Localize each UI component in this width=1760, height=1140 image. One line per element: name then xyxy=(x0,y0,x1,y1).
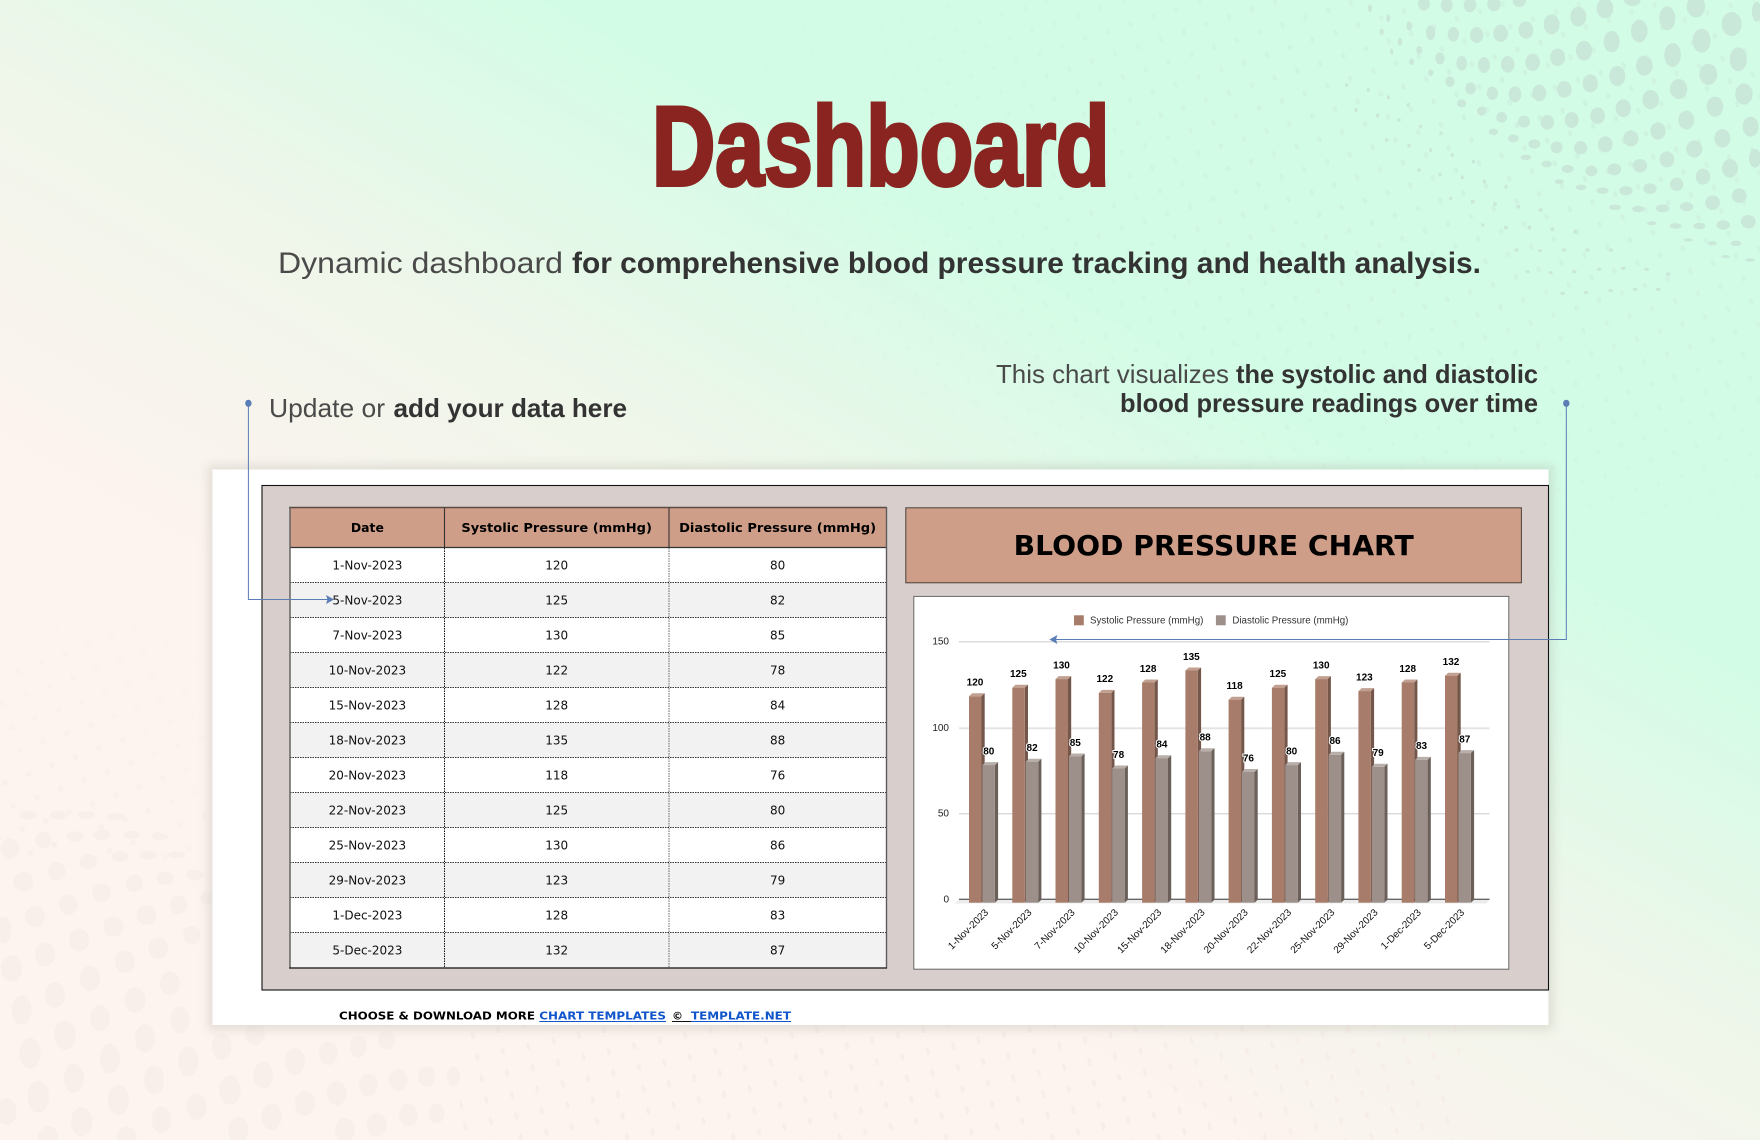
table rows: 78 xyxy=(770,664,785,678)
x axis labels: 29-Nov-2023 xyxy=(1332,907,1381,956)
table rows: 20-Nov-2023 xyxy=(329,768,406,782)
footer link line xyxy=(339,1010,792,1022)
data labels: 76 xyxy=(1243,753,1254,764)
data labels xyxy=(967,652,1471,764)
x axis labels: 25-Nov-2023 xyxy=(1289,907,1338,956)
table rows: 130 xyxy=(545,838,568,852)
table rows: 88 xyxy=(770,734,785,748)
x axis labels: 15-Nov-2023 xyxy=(1116,907,1165,956)
footer link line: © xyxy=(672,1010,683,1022)
table rows: 7-Nov-2023 xyxy=(332,628,402,642)
chart heading xyxy=(906,508,1521,583)
x axis labels: 1-Nov-2023 xyxy=(946,907,991,952)
table rows: 15-Nov-2023 xyxy=(329,698,406,712)
table rows: 5-Dec-2023 xyxy=(332,944,402,958)
table rows: 80 xyxy=(770,558,785,572)
x axis labels: 5-Dec-2023 xyxy=(1422,907,1467,952)
legend: Diastolic Pressure (mmHg) xyxy=(1232,615,1348,626)
data labels: 82 xyxy=(1027,743,1038,754)
table rows: 85 xyxy=(770,628,785,642)
table rows: 1-Dec-2023 xyxy=(332,908,402,922)
arrow: chart callout to chart xyxy=(1049,400,1570,644)
table rows: 76 xyxy=(770,768,785,782)
table rows: 125 xyxy=(545,804,568,818)
table rows: 118 xyxy=(545,768,568,782)
table rows: 135 xyxy=(545,734,568,748)
panel: bar chart xyxy=(914,596,1509,969)
data labels: 120 xyxy=(967,678,984,689)
table rows: 18-Nov-2023 xyxy=(329,734,406,748)
data labels: 79 xyxy=(1373,748,1384,759)
table rows xyxy=(290,548,886,968)
table rows: 86 xyxy=(770,838,785,852)
x axis labels: 1-Dec-2023 xyxy=(1379,907,1424,952)
x axis labels: 7-Nov-2023 xyxy=(1033,907,1078,952)
data labels: 83 xyxy=(1416,741,1427,752)
data labels: 128 xyxy=(1399,664,1416,675)
table rows: 122 xyxy=(545,664,568,678)
y axis and grid: 100 xyxy=(932,723,949,734)
bars: diastolic series xyxy=(982,748,1474,903)
table rows: 22-Nov-2023 xyxy=(329,804,406,818)
x axis labels: 22-Nov-2023 xyxy=(1245,907,1294,956)
data labels: 125 xyxy=(1010,669,1027,680)
table rows: 125 xyxy=(545,594,568,608)
table rows: 123 xyxy=(545,874,568,888)
arrow: data callout to table xyxy=(245,400,334,604)
panel: frame xyxy=(262,486,1548,990)
data labels: 84 xyxy=(1156,740,1168,750)
data labels: 130 xyxy=(1313,660,1330,671)
data labels: 135 xyxy=(1183,652,1200,663)
table rows: 128 xyxy=(545,908,568,922)
bars: systolic series xyxy=(969,668,1461,903)
callout text: chart: the systolic and diastolic xyxy=(1236,359,1538,389)
panel: data table xyxy=(289,507,887,968)
table rows: 29-Nov-2023 xyxy=(329,874,406,888)
data labels: 130 xyxy=(1053,660,1070,671)
data labels: 118 xyxy=(1227,681,1243,692)
x axis labels: 10-Nov-2023 xyxy=(1072,907,1121,956)
callout text: data xyxy=(269,393,627,423)
halftone dots: bottom left xyxy=(0,810,460,1140)
table header: Diastolic Pressure (mmHg) xyxy=(679,520,876,535)
halftone dots: top right xyxy=(1345,0,1760,295)
table rows: 120 xyxy=(545,558,568,572)
table rows: 1-Nov-2023 xyxy=(332,558,402,572)
table rows: 82 xyxy=(770,594,785,608)
x axis labels: 5-Nov-2023 xyxy=(990,907,1035,952)
x axis labels: 18-Nov-2023 xyxy=(1159,907,1208,956)
table rows: 87 xyxy=(770,944,785,958)
table rows: 80 xyxy=(770,804,785,818)
footer link line: CHOOSE & DOWNLOAD MORE xyxy=(339,1010,535,1022)
table header: Systolic Pressure (mmHg) xyxy=(461,520,652,535)
legend xyxy=(1074,615,1348,626)
table rows: 84 xyxy=(770,698,785,712)
y axis and grid: 0 xyxy=(943,895,949,906)
footer link line: TEMPLATE.NET xyxy=(691,1010,792,1022)
chart heading: BLOOD PRESSURE CHART xyxy=(1014,529,1414,562)
data labels: 80 xyxy=(1286,746,1298,757)
table rows: 132 xyxy=(545,944,568,958)
data labels: 122 xyxy=(1096,674,1114,685)
table rows: 10-Nov-2023 xyxy=(329,664,406,678)
data labels: 125 xyxy=(1270,669,1287,680)
table rows: 83 xyxy=(770,908,785,922)
callout text: chart xyxy=(996,359,1538,418)
data labels: 123 xyxy=(1356,672,1373,683)
title: Dashboard xyxy=(652,84,1110,209)
data labels: 80 xyxy=(983,746,995,757)
y axis and grid: 150 xyxy=(932,637,949,648)
legend: Systolic Pressure (mmHg) xyxy=(1090,615,1203,626)
callout text: chart: This chart visualizes xyxy=(996,359,1229,389)
data labels: 86 xyxy=(1329,736,1341,747)
callout text: chart: blood pressure readings over time xyxy=(1120,388,1538,418)
callout text: data: Update or xyxy=(269,393,385,423)
data labels: 132 xyxy=(1443,657,1460,668)
table rows: 5-Nov-2023 xyxy=(332,594,402,608)
data labels: 87 xyxy=(1459,734,1471,745)
callout text: data: add your data here xyxy=(394,393,627,423)
table rows: 79 xyxy=(770,874,785,888)
y axis and grid: 50 xyxy=(938,809,949,820)
table rows: 25-Nov-2023 xyxy=(329,838,406,852)
subtitle: for comprehensive blood pressure tracking and health analysis. xyxy=(572,247,1481,280)
subtitle: Dynamic dashboard xyxy=(278,247,563,280)
table header xyxy=(290,508,886,548)
footer link line: CHART TEMPLATES xyxy=(539,1010,666,1022)
x axis labels xyxy=(946,907,1467,956)
y axis and grid xyxy=(932,637,1490,906)
data labels: 128 xyxy=(1140,664,1157,675)
data labels: 88 xyxy=(1200,733,1211,744)
table header: Date xyxy=(351,520,384,535)
data labels: 78 xyxy=(1113,750,1125,761)
table rows: 130 xyxy=(545,628,568,642)
card shadow xyxy=(208,465,1553,1030)
table rows: 128 xyxy=(545,698,568,712)
x axis labels: 20-Nov-2023 xyxy=(1202,907,1251,956)
white sheet card xyxy=(212,470,1548,1025)
data labels: 85 xyxy=(1070,738,1081,749)
